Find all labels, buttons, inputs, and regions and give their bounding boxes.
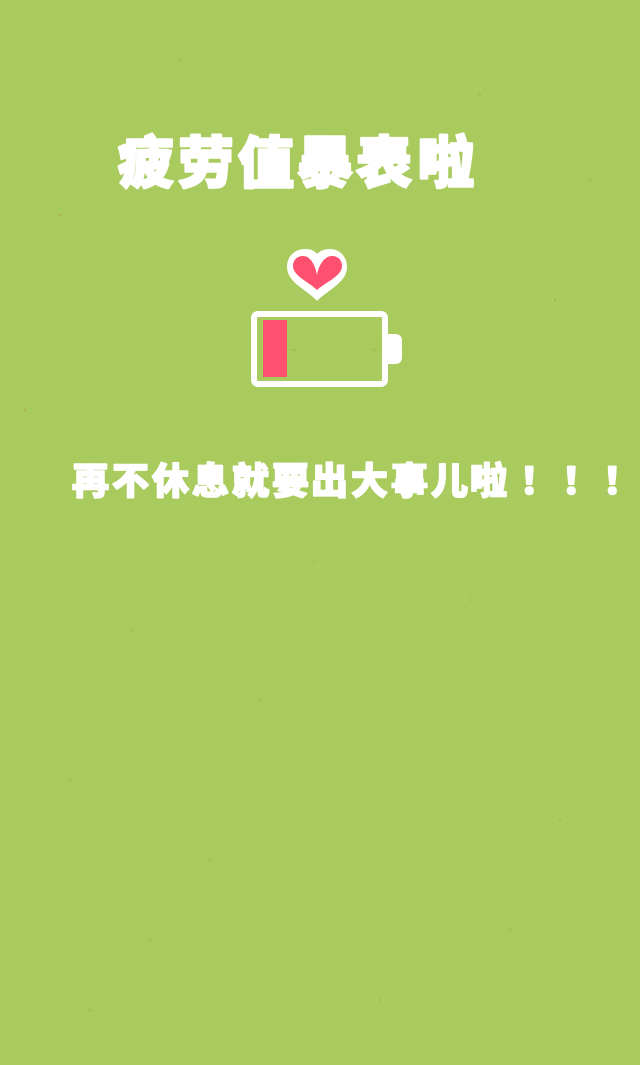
battery charge level xyxy=(263,320,287,377)
icon: low battery xyxy=(254,314,402,384)
icon: heart xyxy=(287,249,347,301)
title: 疲劳值暴表啦 xyxy=(118,132,474,195)
battery body xyxy=(254,314,385,384)
warning message: 再不休息就要出大事儿啦！！！ xyxy=(72,460,640,502)
battery terminal xyxy=(386,334,402,364)
